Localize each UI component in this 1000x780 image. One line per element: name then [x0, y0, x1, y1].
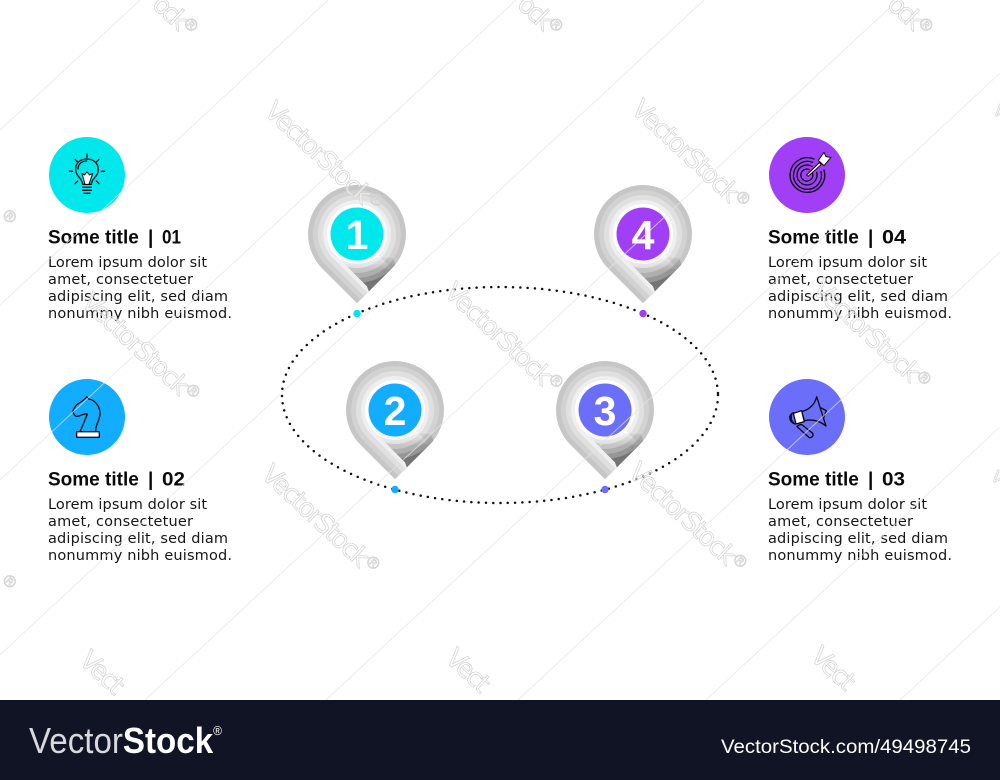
text block 03 [768, 470, 952, 564]
text block 04: 04 [882, 228, 906, 248]
watermark: VectorStock [255, 459, 375, 574]
watermark: ® [912, 366, 936, 390]
icon: target with arrow [769, 137, 845, 213]
footer bar [0, 700, 1000, 780]
text block 01: nonummy nibh euismod. [48, 306, 232, 322]
icon: megaphone [769, 379, 845, 455]
pin 2: 2 [384, 388, 406, 434]
watermark: VectorStock [258, 96, 378, 211]
text block 02: amet, consectetuer [48, 514, 193, 530]
watermark: ® [181, 379, 205, 403]
text block 01: Lorem ipsum dolor sit [48, 255, 207, 271]
text block 03: Some title [768, 470, 859, 490]
text block 03: | [868, 470, 873, 490]
text block 01: | [148, 228, 153, 248]
watermark: Vect [73, 645, 130, 701]
watermark: VectorStock [75, 287, 195, 402]
watermark: ® [728, 549, 752, 573]
watermark: ® [544, 12, 568, 37]
text block 04: Some title [768, 228, 859, 248]
dotted ellipse connector [282, 287, 718, 503]
text block 02 [48, 470, 232, 564]
watermark: ® [364, 188, 388, 212]
pin 1 [297, 174, 417, 326]
text block 04: adipiscing elit, sed diam [768, 289, 948, 305]
footer logo: ® [213, 723, 222, 738]
text block 03: amet, consectetuer [768, 514, 913, 530]
text block 04: nonummy nibh euismod. [768, 306, 952, 322]
text block 01: amet, consectetuer [48, 272, 193, 288]
text block 04: Lorem ipsum dolor sit [768, 255, 927, 271]
watermark: ® [179, 12, 203, 37]
text block 01 [48, 228, 232, 322]
text block 03: 03 [882, 470, 905, 490]
text block 04: | [868, 228, 873, 248]
text block 01: Some title [48, 228, 139, 248]
text block 02: | [148, 470, 153, 490]
pin 3: 3 [594, 388, 616, 434]
text block 02: adipiscing elit, sed diam [48, 531, 228, 547]
pin 1: 1 [346, 212, 368, 258]
text block 03: Lorem ipsum dolor sit [768, 497, 927, 513]
text block 02: nonummy nibh euismod. [48, 548, 232, 564]
watermark: ® [361, 551, 385, 575]
watermark: ® [544, 369, 568, 393]
watermark: ® [914, 12, 938, 37]
watermark: VectorStock [625, 94, 745, 209]
icon: light bulb [49, 137, 125, 213]
watermark: Vect [804, 641, 861, 697]
footer logo: VectorStock [29, 720, 221, 761]
pin 2 [335, 350, 455, 502]
pin 4 [583, 174, 703, 326]
text block 04: amet, consectetuer [768, 272, 913, 288]
watermark: Vect [439, 643, 496, 699]
text block 02: Some title [48, 470, 139, 490]
text block 04 [768, 228, 952, 322]
watermark: VectorStock [622, 457, 742, 572]
pin 3 [545, 350, 665, 502]
footer image id: VectorStock.com/49498745 [721, 736, 971, 758]
text block 01: 01 [162, 228, 181, 248]
watermark: ® [731, 186, 755, 210]
text block 02: 02 [162, 470, 185, 490]
icon: chess knight [49, 379, 125, 455]
watermark: VectorStock [806, 274, 926, 389]
text block 03: nonummy nibh euismod. [768, 548, 952, 564]
text block 03: adipiscing elit, sed diam [768, 531, 948, 547]
pin 4: 4 [632, 212, 655, 258]
watermark: VectorStock [438, 277, 558, 392]
text block 01: adipiscing elit, sed diam [48, 289, 228, 305]
text block 02: Lorem ipsum dolor sit [48, 497, 207, 513]
